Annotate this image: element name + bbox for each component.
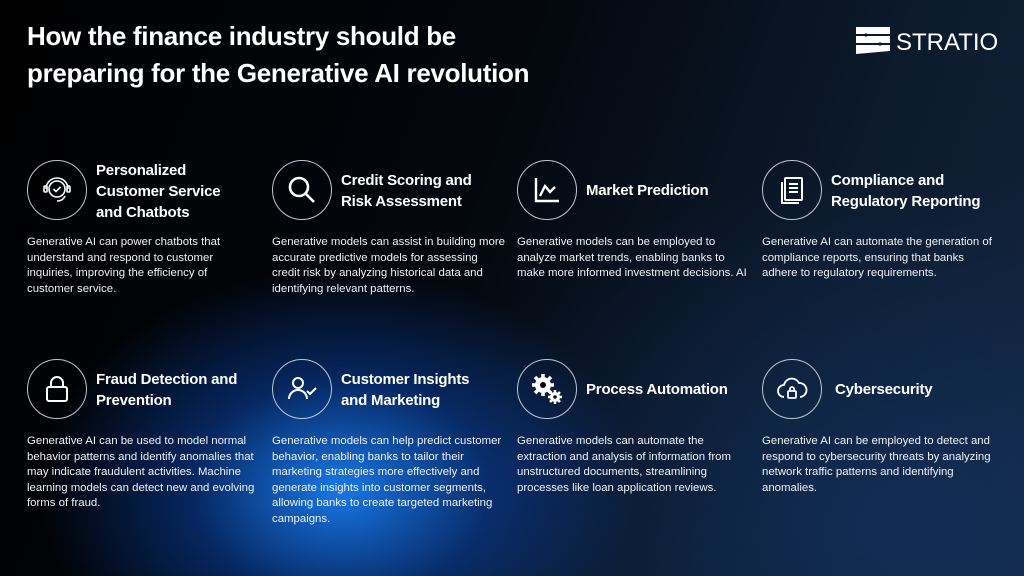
logo <box>856 27 998 56</box>
text: network traffic patterns and identifying <box>762 466 954 478</box>
text: unstructured documents, streamlining <box>517 466 707 478</box>
icon: headset <box>27 160 87 220</box>
text: respond to cybersecurity threats by analyzing <box>762 451 991 463</box>
text: make more informed investment decisions. AI <box>517 267 747 279</box>
title: preparing for the Generative AI revolution <box>27 58 529 88</box>
icon: user check <box>272 359 332 419</box>
text: Generative AI can be used to model normal <box>27 435 246 447</box>
text: forms of fraud. <box>27 497 100 509</box>
text: Generative AI can be employed to detect and <box>762 435 990 447</box>
card: fraud detection <box>27 359 254 509</box>
text <box>762 236 992 279</box>
icon: chart <box>517 160 577 220</box>
logo: STRATIO <box>896 29 998 56</box>
icon: cloud lock <box>762 359 822 419</box>
text: anomalies. <box>762 482 817 494</box>
text: Generative AI can automate the generation of <box>762 236 992 248</box>
heading: Customer Insights <box>341 371 469 388</box>
heading: Credit Scoring and <box>341 172 472 189</box>
card: compliance <box>762 160 992 279</box>
text: adhere to regulatory requirements. <box>762 267 937 279</box>
text: extraction and analysis of information from <box>517 451 731 463</box>
heading: Personalized <box>96 162 186 179</box>
heading: Customer Service <box>96 183 220 200</box>
text: allowing banks to create targeted marketing <box>272 497 492 509</box>
title: How the finance industry should be <box>27 21 456 51</box>
text: generate insights into customer segments, <box>272 482 486 494</box>
text <box>27 435 254 509</box>
card: customer insights <box>272 359 501 525</box>
heading: Prevention <box>96 392 172 409</box>
icon: document <box>762 160 822 220</box>
heading: Cybersecurity <box>835 381 932 398</box>
heading: Risk Assessment <box>341 193 462 210</box>
card: credit scoring <box>272 160 505 295</box>
icon: gears <box>517 359 577 419</box>
text: analyze market trends, enabling banks to <box>517 252 725 264</box>
heading: Regulatory Reporting <box>831 193 980 210</box>
text <box>27 236 220 295</box>
text <box>517 236 747 279</box>
heading <box>831 172 980 210</box>
heading: Compliance and <box>831 172 944 189</box>
heading: and Chatbots <box>96 204 189 221</box>
text: Generative models can be employed to <box>517 236 715 248</box>
text <box>272 435 501 525</box>
card: cybersecurity <box>762 359 991 494</box>
heading <box>96 162 220 221</box>
text <box>762 435 991 494</box>
text: behavior patterns and identify anomalies that <box>27 451 254 463</box>
card: market prediction <box>517 160 747 279</box>
text: Generative AI can power chatbots that <box>27 236 220 248</box>
text: understand and respond to customer <box>27 252 213 264</box>
text <box>272 236 505 295</box>
text: marketing strategies more effectively and <box>272 466 479 478</box>
heading <box>96 371 237 409</box>
heading: and Marketing <box>341 392 440 409</box>
text: may indicate fraudulent activities. Machine <box>27 466 241 478</box>
text: credit risk by analyzing historical data and <box>272 267 483 279</box>
heading: Fraud Detection and <box>96 371 237 388</box>
text: Generative models can help predict customer <box>272 435 501 447</box>
text: customer service. <box>27 283 116 295</box>
text: processes like loan application reviews. <box>517 482 716 494</box>
text: Generative models can assist in building more <box>272 236 505 248</box>
title <box>27 21 529 88</box>
heading <box>341 172 472 210</box>
text: learning models can detect new and evolving <box>27 482 254 494</box>
icon: search <box>272 160 332 220</box>
text: behavior, enabling banks to tailor their <box>272 451 464 463</box>
text: compliance reports, ensuring that banks <box>762 252 964 264</box>
text: accurate predictive models for assessing <box>272 252 478 264</box>
text <box>517 435 731 494</box>
text: inquiries, improving the efficiency of <box>27 267 207 279</box>
card: process automation <box>517 359 731 494</box>
text: identifying relevant patterns. <box>272 283 414 295</box>
icon: lock <box>27 359 87 419</box>
heading: Process Automation <box>586 381 728 398</box>
card: personalized customer service <box>27 160 220 295</box>
text: campaigns. <box>272 513 330 525</box>
heading <box>341 371 469 409</box>
heading: Market Prediction <box>586 182 708 199</box>
text: Generative models can automate the <box>517 435 704 447</box>
